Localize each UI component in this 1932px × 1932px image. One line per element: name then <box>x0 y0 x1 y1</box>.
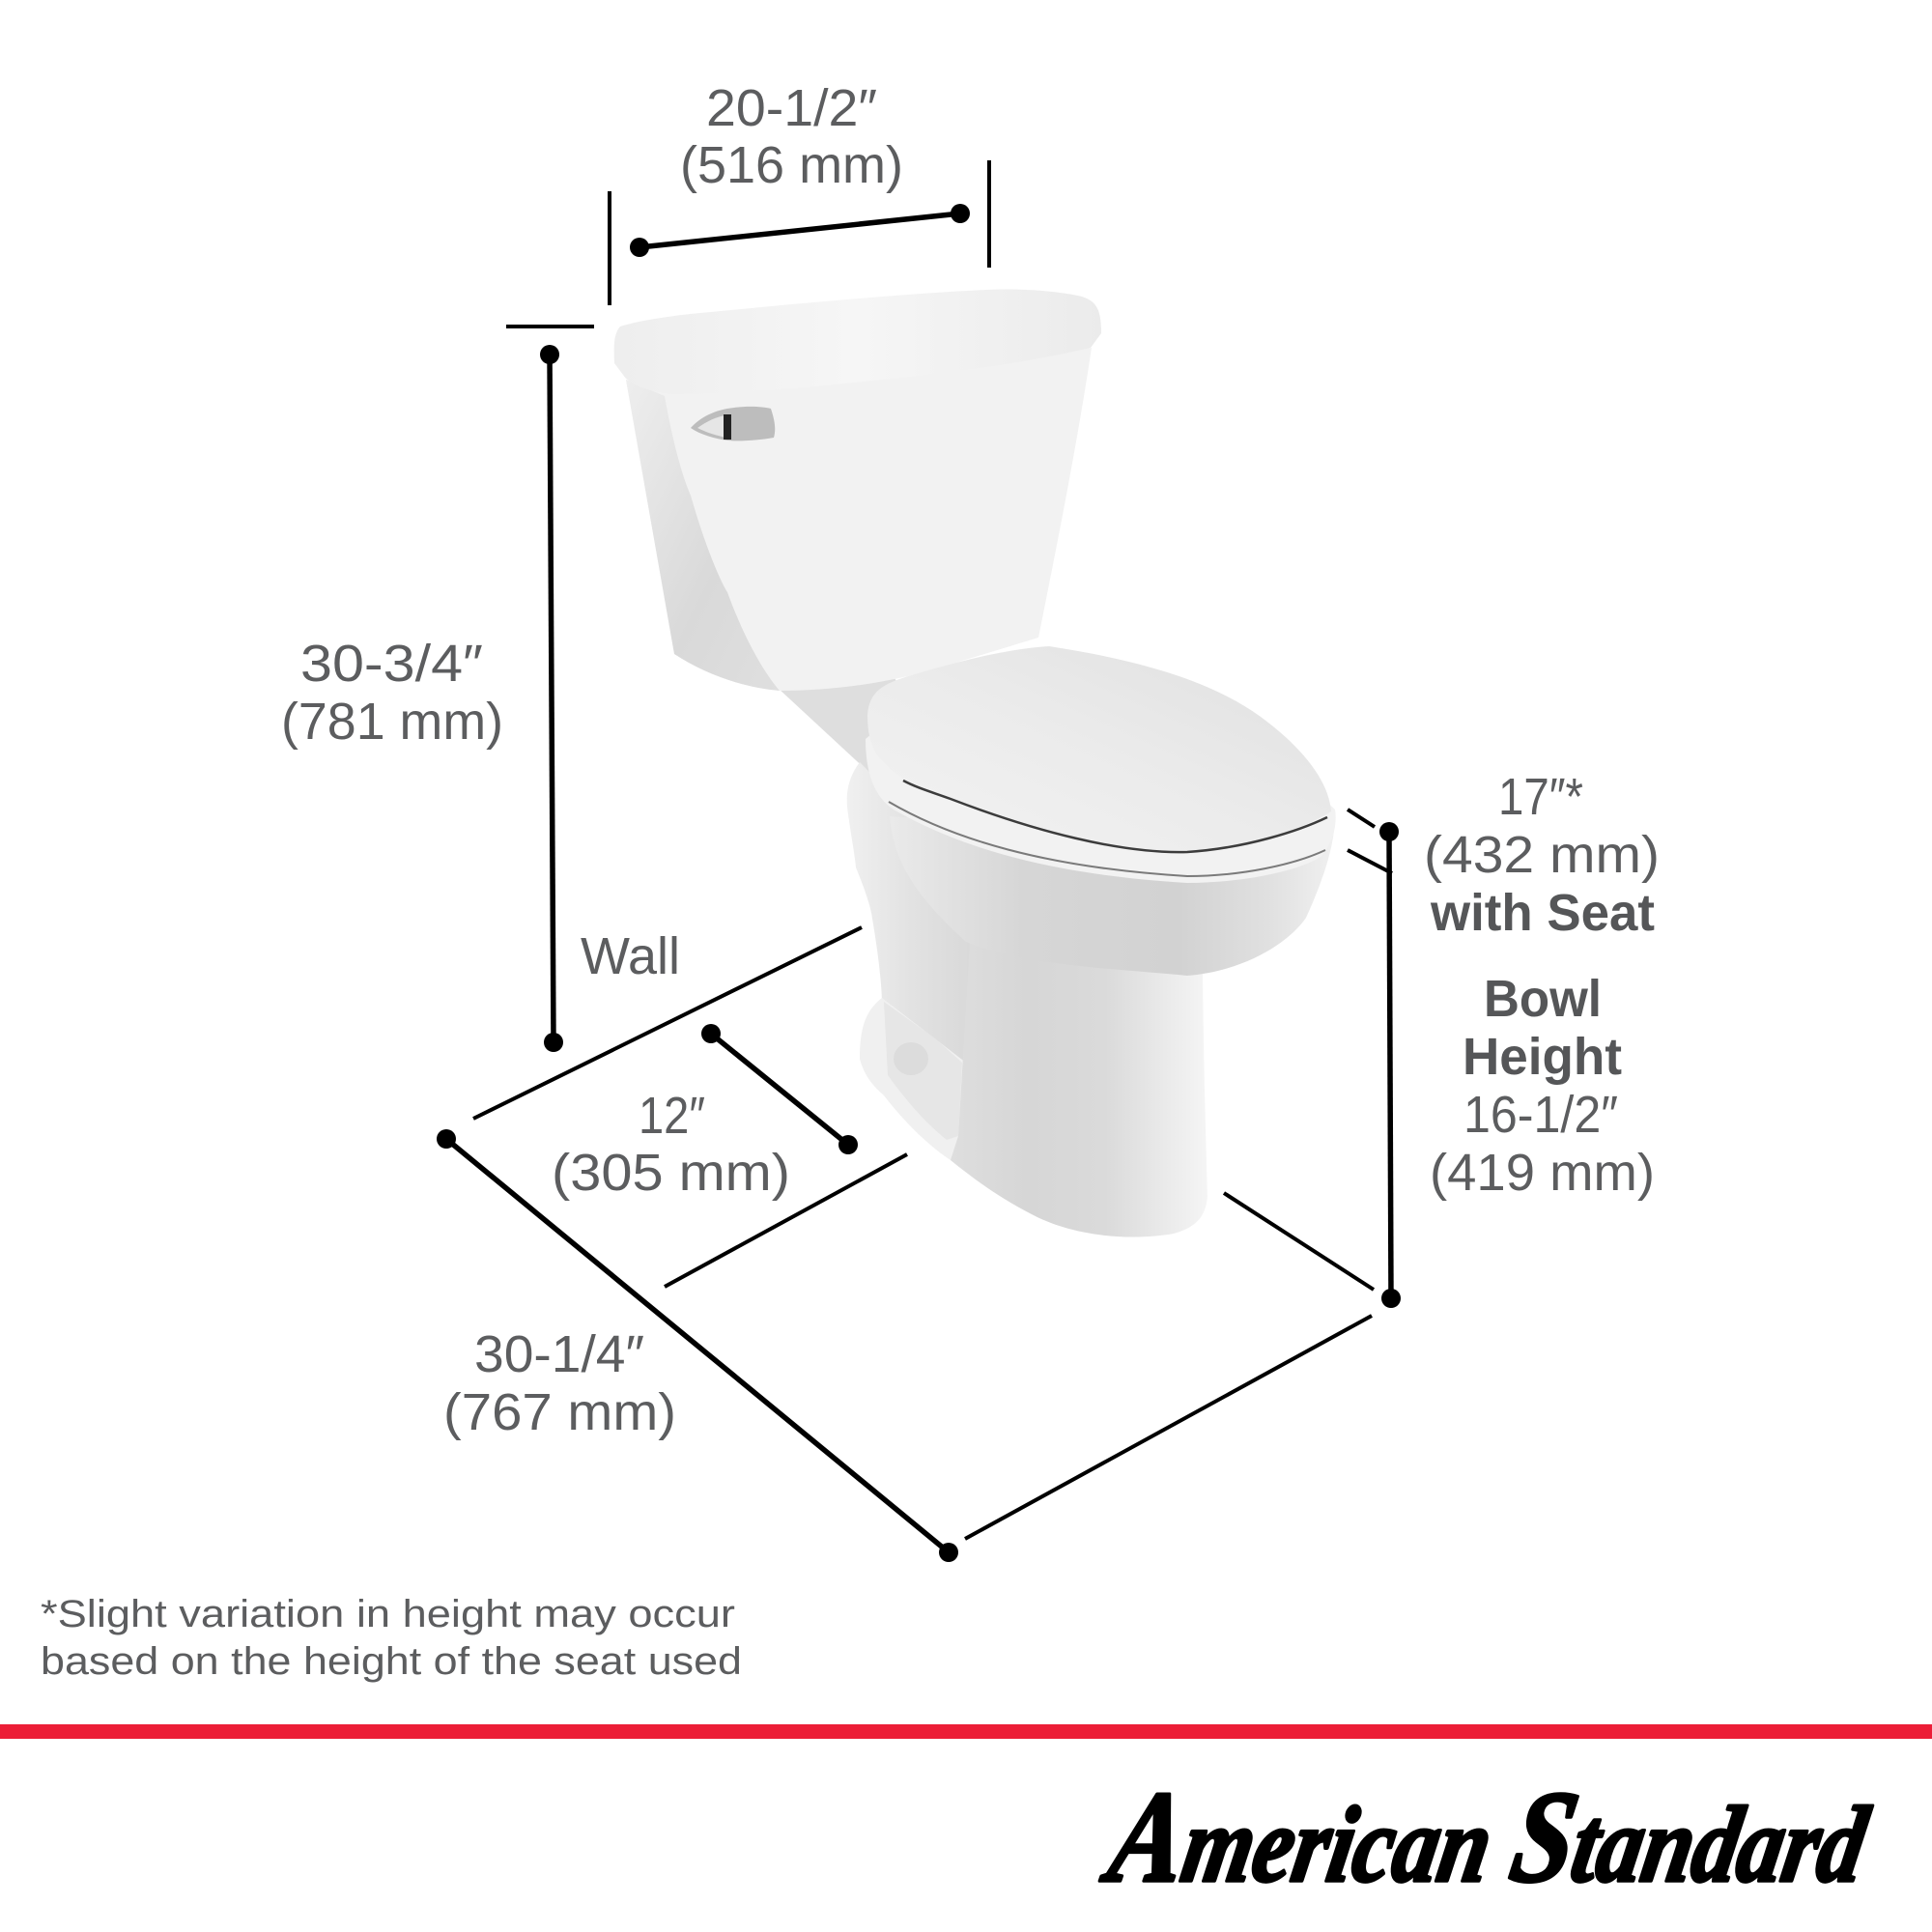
toilet illustration <box>614 289 1336 1237</box>
label: tank width: (516 mm) <box>680 136 903 194</box>
bolt cap <box>894 1042 928 1075</box>
dimension: overall height <box>506 327 594 1052</box>
tank lid <box>614 289 1101 394</box>
red divider bar <box>0 1724 1932 1739</box>
label: bowl height <box>1430 970 1655 1202</box>
rear trap <box>847 762 976 1072</box>
ring edge line <box>889 802 1325 876</box>
tank body <box>626 348 1092 691</box>
label: overall height <box>281 635 503 751</box>
footnote: based on the height of the seat used <box>41 1640 742 1683</box>
bowl <box>890 816 1334 976</box>
label: bowl height: Bowl <box>1484 970 1602 1028</box>
label: rough-in: (305 mm) <box>552 1144 790 1202</box>
label: rough-in <box>552 1087 790 1202</box>
footnote: *Slight variation in height may occur <box>41 1593 735 1635</box>
label: overall height: (781 mm) <box>281 693 503 751</box>
foot recess <box>884 1002 962 1140</box>
neck between tank and bowl <box>778 676 927 773</box>
dimension: rough-in <box>473 927 907 1287</box>
pedestal <box>951 942 1208 1237</box>
dimension: bowl height <box>1348 810 1401 1308</box>
dimension: tank width <box>610 160 989 305</box>
label: bowl height: 16-1/2″ <box>1463 1086 1618 1144</box>
label: height with seat: 17″* <box>1498 768 1583 826</box>
tank side shading <box>626 380 780 691</box>
label: height with seat <box>1424 768 1660 942</box>
label: tank width <box>680 79 903 194</box>
seat lid <box>867 646 1331 852</box>
label: height with seat: (432 mm) <box>1424 826 1660 884</box>
label: bowl height: Height <box>1463 1028 1622 1086</box>
label: tank width: 20-1/2″ <box>706 79 877 137</box>
label: bowl height: (419 mm) <box>1430 1144 1655 1202</box>
label: overall depth: 30-1/4″ <box>474 1325 644 1383</box>
label: overall depth: (767 mm) <box>443 1383 676 1441</box>
dimension: overall depth <box>437 1129 1374 1562</box>
label: overall height: 30-3/4″ <box>300 635 483 693</box>
lid shadow line <box>903 781 1327 852</box>
seat ring <box>866 696 1336 883</box>
label: rough-in: 12″ <box>639 1087 705 1145</box>
label: overall depth <box>443 1325 676 1441</box>
base foot <box>860 998 971 1160</box>
label: height with seat: with Seat <box>1430 884 1655 942</box>
logo: American Standard: American Standard <box>1094 1764 1881 1910</box>
flush lever <box>691 407 775 440</box>
label: wall: Wall <box>581 927 680 985</box>
footnote <box>41 1593 742 1683</box>
